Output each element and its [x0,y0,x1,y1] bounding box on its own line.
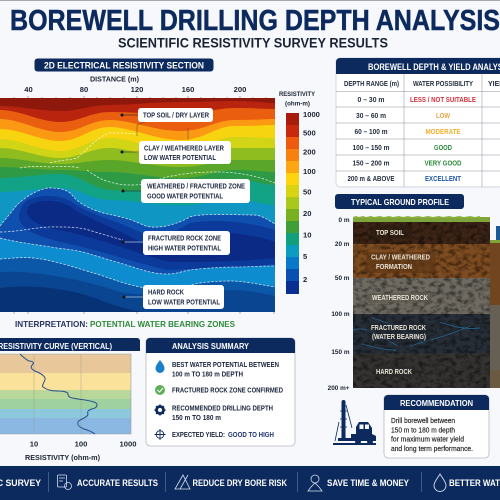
recommendation body: for maximum water yield [391,434,464,444]
callout: top soil: TOP SOIL / DRY LAYER [143,113,209,120]
table depth column: 0 – 30 m [358,95,384,104]
table depth column: 150 – 200 m [352,158,390,168]
recommendation body: and long term performance. [391,444,473,453]
icon: target [154,429,166,440]
callout: clay: CLAY / WEATHERED LAYER [144,146,224,152]
depth scale: 0 m [338,217,350,224]
panel: resistivity curve [0,338,140,462]
table depth column: 60 – 100 m [354,127,388,136]
resistivity colour legend [279,91,320,294]
recommendation body: 150 m to 180 m depth [391,426,455,434]
table water possibility column [410,95,476,183]
resistivity colour legend: RESISTIVITY [279,91,315,98]
side strip of terrain with rig [490,226,500,388]
distance axis label: DISTANCE (m) [90,74,139,84]
callout: fractured rock zone: FRACTURED ROCK ZONE [148,236,221,242]
icon: save time and money [308,475,322,491]
recommended depth text: RECOMMENDED DRILLING DEPTH [172,406,273,412]
distance axis ticks: 160 [182,85,194,94]
resistivity colour legend: 10 [303,230,311,240]
table depth column: 30 – 60 m [356,111,386,120]
recommendation heading: RECOMMENDATION [400,399,473,408]
expected yield text: GOOD TO HIGH [228,432,274,439]
layer labels: FRACTURED ROCK [371,323,427,332]
table depth column [348,95,395,183]
subtitle: SCIENTIFIC RESISTIVITY SURVEY RESULTS [118,36,388,50]
table column headers: WATER POSSIBILITY [413,81,473,88]
best water potential text [172,362,279,378]
layer labels: TOP SOIL [376,228,405,237]
layer labels [366,226,436,377]
distance axis ticks: 200 [234,85,246,94]
resistivity colour legend: 200 [303,148,316,156]
recommendation body [391,416,473,453]
resistivity colour legend: 100 [303,167,316,176]
layer labels: CLAY / WEATHERED [371,252,430,262]
layer labels: (WATER BEARING) [372,332,426,341]
callout: hard rock: LOW WATER POTENTIAL [148,300,221,306]
table water possibility column: LOW [436,111,450,120]
table water possibility column: MODERATE [426,127,461,136]
curve heading: RESISTIVITY CURVE (VERTICAL) [0,342,112,351]
curve axis labels [25,440,136,462]
recommended depth text [172,406,273,422]
interpretation line: INTERPRETATION: [15,320,88,329]
table heading [336,58,500,74]
curve axis labels: 1000 [120,440,136,448]
table water possibility column: GOOD [434,143,452,152]
icon: reduce dry bore risk [175,475,190,489]
callout: clay [120,141,231,164]
curve heading [0,338,140,351]
callout: top soil [120,108,213,122]
resistivity colour legend: 20 [303,209,311,218]
depth scale: 150 m [331,349,350,356]
callout: weathered zone [122,179,250,203]
callout: hard rock: HARD ROCK [148,290,184,296]
resistivity colour legend: 5 [303,252,308,261]
callout: fractured rock zone: HIGH WATER POTENTIAL [148,246,222,252]
curve chart [0,354,131,434]
section heading: 2D ELECTRICAL RESISTIVITY SECTION [44,60,204,70]
table water possibility column: VERY GOOD [424,158,462,168]
depth scale [328,217,350,392]
panel: 2D electrical resistivity section [0,58,320,329]
depth scale: 20 m [335,241,350,248]
curve axis labels: 100 [75,440,87,448]
depth scale: 50 m [335,275,350,282]
icon: better water [434,474,446,492]
panel: analysis summary [146,338,295,446]
layer labels: FORMATION [376,262,412,271]
icon: gear [154,404,166,416]
resistivity colour legend: 50 [303,188,311,196]
distance axis ticks: 120 [131,85,143,94]
resistivity contour chart [0,98,275,312]
panel: typical ground profile [328,194,500,392]
layer labels: HARD ROCK [376,367,413,376]
interpretation line: POTENTIAL WATER BEARING ZONES [90,320,236,329]
profile heading [335,194,464,209]
callout: weathered zone: WEATHERED / FRACTURED ZONE [147,184,245,190]
panel: borewell depth and yield table [336,58,500,187]
soil layers [353,216,490,388]
callout: hard rock [122,285,224,309]
recommendation body: Drill borewell between [391,416,455,425]
table water possibility column: LESS / NOT SUITABLE [410,95,476,104]
profile heading: TYPICAL GROUND PROFILE [351,197,449,207]
icon: drilling rig [333,400,376,445]
summary heading [146,338,295,353]
distance axis ticks: 40 [24,85,33,94]
curve axis labels: 10 [30,440,38,448]
table column headers [344,81,500,88]
footer banner [0,466,500,500]
icon: accurate results [58,475,72,490]
resistivity colour legend: 2 [303,275,307,284]
layer labels: WEATHERED ROCK [372,293,429,302]
recommended depth text: 150 m TO 180 m [172,415,221,422]
icon: water drop [156,360,164,373]
fractured zone confirmed text: FRACTURED ROCK ZONE CONFIRMED [172,388,283,394]
footer item: reduce dry bore risk: REDUCE DRY BORE RISK [192,478,287,489]
distance axis ticks [14,85,274,314]
distance axis ticks: 80 [80,85,88,94]
icon: check [155,385,165,395]
footer item: accurate results: ACCURATE RESULTS [77,478,158,489]
footer item: save time and money: SAVE TIME & MONEY [327,478,409,489]
table depth column: 100 – 150 m [352,143,390,152]
curve axis labels: RESISTIVITY (ohm-m) [25,453,100,462]
table column headers: DEPTH RANGE (m) [344,81,399,88]
callout: clay: LOW WATER POTENTIAL [144,155,217,162]
expected yield text: EXPECTED YIELD: [172,432,225,439]
best water potential text: BEST WATER POTENTIAL BETWEEN [172,362,279,369]
summary heading: ANALYSIS SUMMARY [172,342,250,351]
table depth column: 200 m & ABOVE [348,174,395,183]
depth scale: 200 m+ [328,385,350,392]
resistivity colour legend: 500 [303,128,316,138]
callout: weathered zone: GOOD WATER POTENTIAL [147,194,224,200]
resistivity colour legend: 1000 [303,110,320,119]
callout: fractured rock zone [122,231,230,255]
depth scale: 100 m [331,311,350,318]
panel: recommendation [384,395,489,458]
best water potential text: 100 m TO 180 m DEPTH [172,372,243,378]
table water possibility column: EXCELLENT [425,174,462,183]
resistivity colour legend: (ohm-m) [285,100,310,108]
